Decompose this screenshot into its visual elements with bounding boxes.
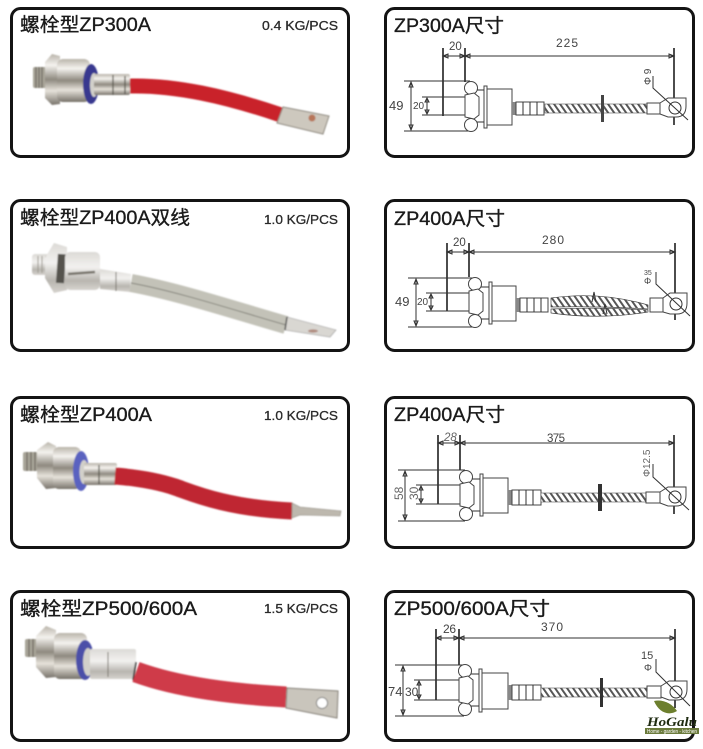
photo: ZP500/600A stud device with red cable xyxy=(25,626,338,718)
dimension labels: 20 xyxy=(417,297,429,308)
panel: ZP500/600A dimensions xyxy=(386,592,699,740)
heading: ZP400A size: ZP400A尺寸 xyxy=(394,404,505,426)
dimension labels: Φ 9 xyxy=(643,68,654,85)
dimension labels: 375 xyxy=(547,433,565,445)
dimension labels: 30 xyxy=(407,486,421,500)
photo: ZP300A stud device with red cable xyxy=(33,54,329,134)
dimension labels xyxy=(392,432,653,500)
heading: ZP300A size: ZP300A尺寸 xyxy=(394,15,504,37)
dimension labels xyxy=(395,233,652,309)
dimension labels: 15 xyxy=(641,650,653,662)
diagram: ZP300A drawing xyxy=(404,48,688,132)
dimension labels: 49 xyxy=(389,98,403,113)
heading: ZP400A: 螺栓型ZP400A xyxy=(20,404,152,426)
dimension labels: 20 xyxy=(449,41,462,53)
dimension labels: 35 xyxy=(644,270,652,277)
weight: 1.0 KG/PCS: 1.0 KG/PCS xyxy=(264,212,338,227)
heading: ZP400A twin wire: 螺栓型ZP400A双线 xyxy=(20,207,190,229)
dimension labels: Φ12.5 xyxy=(642,449,653,477)
dimension labels xyxy=(389,36,654,113)
dimension labels: Φ xyxy=(644,276,651,286)
dimension labels: 30 xyxy=(405,685,419,699)
heading: ZP500/600A: 螺栓型ZP500/600A xyxy=(20,598,197,620)
dimension labels: 225 xyxy=(556,36,578,50)
diagram: ZP400A twin wire drawing xyxy=(408,243,690,328)
weight: 1.0 KG/PCS: 1.0 KG/PCS xyxy=(264,408,338,423)
panel: ZP400A product xyxy=(12,398,348,548)
weight: 0.4 KG/PCS: 0.4 KG/PCS xyxy=(262,18,338,33)
tagline bar: Home - garden - kitchen xyxy=(647,729,697,735)
icon: leaf xyxy=(654,700,677,713)
panel: ZP300A product xyxy=(12,8,348,156)
panel: ZP300A dimensions xyxy=(386,8,694,156)
panel: ZP400A twin wire product xyxy=(12,200,348,350)
heading: ZP300A: 螺栓型ZP300A xyxy=(20,14,151,36)
dimension labels: 20 xyxy=(453,237,466,249)
panel: ZP400A dimensions xyxy=(386,398,694,548)
photo: ZP400A stud device with red cable xyxy=(23,442,341,518)
dimension labels: 58 xyxy=(392,486,406,500)
dimension labels xyxy=(388,620,653,699)
dimension labels: 20 xyxy=(413,101,425,112)
photo: ZP400A stud device with braided wire xyxy=(32,243,336,337)
dimension labels: 28 xyxy=(443,432,457,444)
panel: ZP400A twin wire dimensions xyxy=(386,200,694,350)
weight: 1.5 KG/PCS: 1.5 KG/PCS xyxy=(264,601,338,616)
dimension labels: 74 xyxy=(388,684,402,699)
diagram: ZP400A drawing xyxy=(398,435,689,521)
dimension labels: Φ xyxy=(644,663,652,674)
heading: ZP400A size: ZP400A尺寸 xyxy=(394,208,505,230)
dimension labels: 370 xyxy=(541,620,563,634)
dimension labels: 280 xyxy=(542,233,564,247)
panel: ZP500/600A product xyxy=(12,592,348,740)
diagram: ZP500/600A drawing xyxy=(395,629,690,716)
dimension labels: 26 xyxy=(443,622,456,636)
dimension labels: 49 xyxy=(395,294,409,309)
heading: ZP500/600A size: ZP500/600A尺寸 xyxy=(394,598,550,620)
logo: HoGalu watermark xyxy=(645,700,699,735)
brand name: HoGalu xyxy=(646,714,697,729)
